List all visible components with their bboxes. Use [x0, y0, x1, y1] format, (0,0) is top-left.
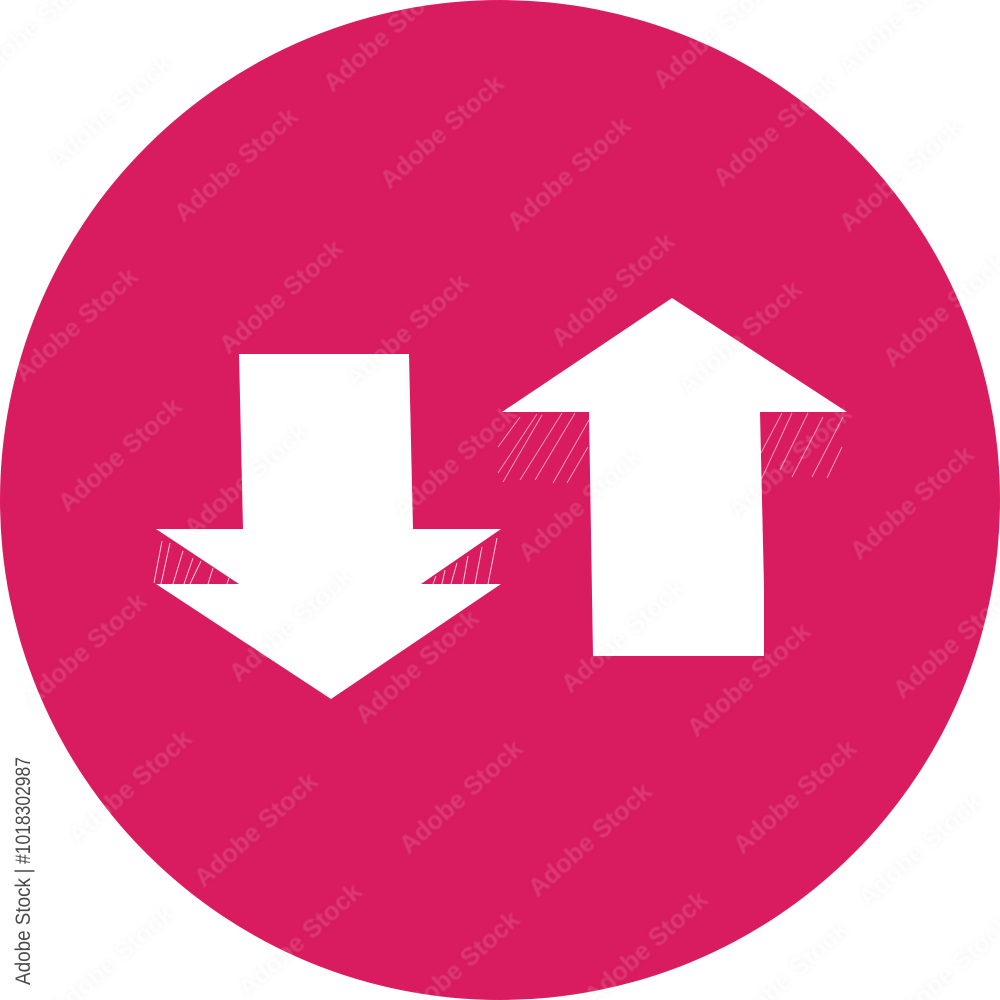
watermark pattern: Adobe Stock: [523, 777, 658, 903]
watermark pattern: Adobe Stock: [845, 440, 980, 566]
watermark pattern: Adobe Stock: [43, 49, 178, 175]
watermark pattern: Adobe Stock: [9, 262, 144, 388]
watermark pattern: Adobe Stock: [723, 399, 858, 525]
watermark pattern: Adobe Stock: [853, 787, 988, 913]
vertical stock id text: #1018302987: [12, 757, 35, 864]
watermark pattern: Adobe Stock: [18, 587, 153, 713]
watermark pattern: Adobe Stock: [63, 724, 198, 850]
watermark pattern: Adobe Stock: [502, 111, 637, 237]
watermark pattern: Adobe Stock: [340, 268, 475, 394]
watermark pattern: Adobe Stock: [546, 227, 681, 353]
watermark pattern: Adobe Stock: [224, 562, 359, 688]
hatching behind up arrow: [498, 413, 843, 483]
hatching behind down arrow: [154, 538, 497, 584]
watermark pattern: Adobe Stock: [350, 604, 485, 730]
up arrow: [502, 298, 847, 656]
watermark pattern: Adobe Stock: [169, 102, 304, 228]
watermark pattern: Adobe Stock: [53, 392, 188, 518]
watermark pattern: Adobe Stock: [214, 234, 349, 360]
watermark pattern: Adobe Stock: [556, 573, 691, 699]
watermark pattern: Adobe Stock: [728, 734, 863, 860]
vertical stock id text: Adobe Stock: [12, 878, 35, 985]
watermark pattern: Adobe Stock: [179, 417, 314, 543]
watermark pattern: Adobe Stock: [394, 734, 529, 860]
down arrow: [156, 354, 501, 699]
watermark pattern: Adobe Stock: [682, 617, 817, 743]
watermark pattern: Adobe Stock: [673, 275, 808, 401]
watermark pattern: Adobe Stock: [189, 767, 324, 893]
watermark pattern: Adobe Stock: [375, 69, 510, 195]
watermark pattern: Adobe Stock: [513, 442, 648, 568]
watermark pattern: Adobe Stock: [708, 67, 843, 193]
vertical stock id text: [12, 757, 35, 985]
watermark pattern: Adobe Stock: [388, 399, 523, 525]
watermark pattern: Adobe Stock: [834, 112, 969, 238]
vertical stock id text: |: [12, 868, 35, 874]
watermark pattern: Adobe Stock: [233, 877, 368, 1000]
